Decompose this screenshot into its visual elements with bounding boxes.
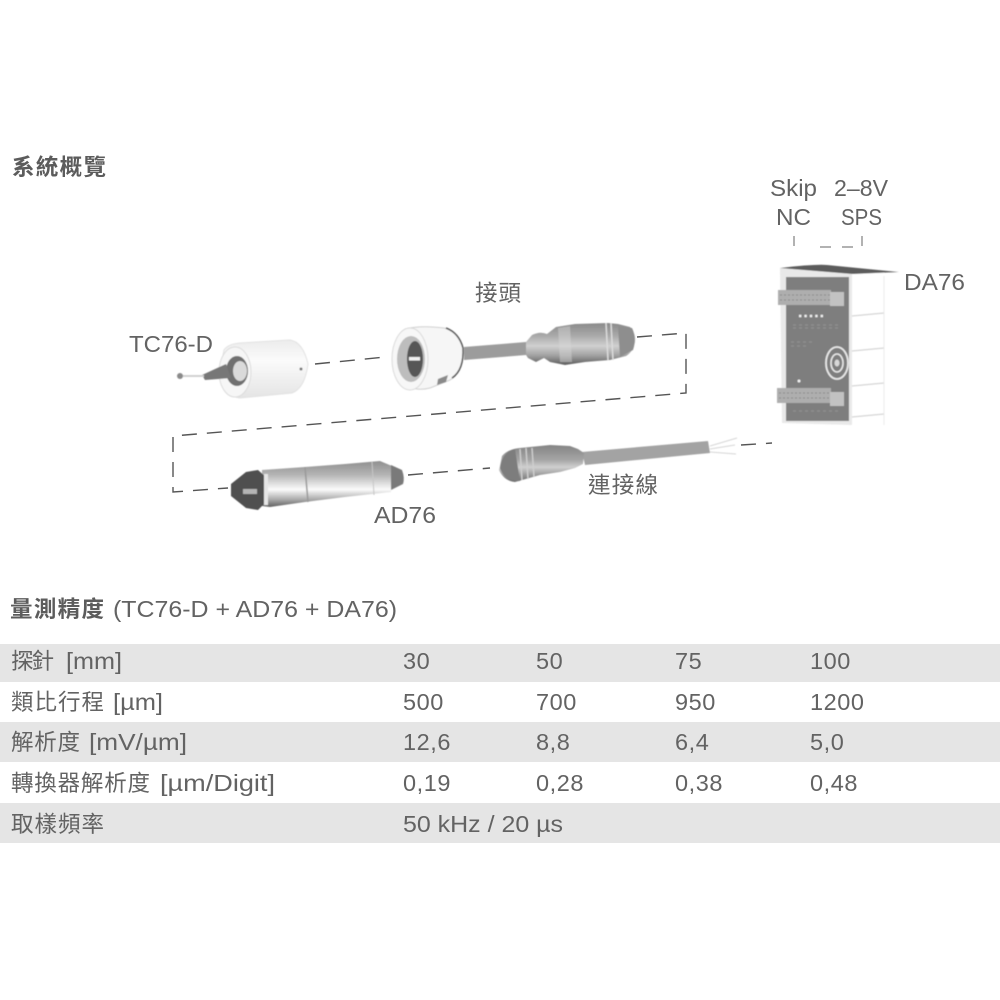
row 3: resolution: 解析度 bbox=[11, 730, 80, 755]
row 4: converter resolution: 0,38 bbox=[675, 770, 723, 796]
label: AD76: AD76 bbox=[374, 502, 436, 528]
row 4: converter resolution: 0,19 bbox=[403, 770, 451, 796]
row 1: probe: 100 bbox=[810, 648, 851, 674]
row 4: converter resolution: 轉換器解析度 bbox=[11, 771, 150, 796]
row 2: analog stroke bbox=[0, 682, 1000, 722]
label: DA76: DA76 bbox=[904, 269, 965, 295]
icon: DA76 module bbox=[777, 265, 899, 426]
row 3: resolution: 8,8 bbox=[536, 729, 570, 755]
heading: measuring accuracy bbox=[10, 596, 397, 622]
icon: AD76 amplifier bbox=[231, 461, 404, 510]
icon: connection cable bbox=[499, 438, 737, 482]
heading: measuring accuracy: 量測精度 bbox=[10, 597, 104, 622]
row 3: resolution: 6,4 bbox=[675, 729, 709, 755]
labels: DA76 terminals: Skip bbox=[770, 175, 817, 201]
row 1: probe: 50 bbox=[536, 648, 563, 674]
row 5: sampling rate: 取樣頻率 bbox=[11, 812, 104, 837]
row 1: probe bbox=[0, 644, 1000, 682]
icon: connector with cable bbox=[392, 323, 635, 390]
labels: DA76 terminals: 2–8V bbox=[834, 175, 888, 201]
row 3: resolution: 5,0 bbox=[810, 729, 844, 755]
row 5: sampling rate bbox=[0, 803, 1000, 843]
row 3: resolution: 12,6 bbox=[403, 729, 451, 755]
label: TC76-D: TC76-D bbox=[129, 331, 213, 357]
label: connection cable: 連接線 bbox=[588, 473, 658, 498]
labels: DA76 terminals: SPS bbox=[841, 204, 882, 230]
row 3: resolution: [mV/µm] bbox=[89, 729, 187, 755]
row 1: probe: 75 bbox=[675, 648, 702, 674]
icon: TC76-D probe bbox=[177, 340, 308, 398]
row 1: probe: 30 bbox=[403, 648, 430, 674]
row 2: analog stroke: 類比行程 bbox=[11, 690, 104, 715]
row 2: analog stroke: 1200 bbox=[810, 689, 864, 715]
dashed connection lines bbox=[173, 236, 862, 492]
row 4: converter resolution: [µm/Digit] bbox=[160, 770, 275, 796]
row 2: analog stroke: [µm] bbox=[113, 689, 163, 715]
label: connector: 接頭 bbox=[475, 281, 521, 306]
heading: system overview: 系統概覽 bbox=[12, 155, 106, 180]
row 1: probe: [mm] bbox=[66, 648, 122, 674]
row 5: sampling rate: 50 kHz / 20 µs bbox=[403, 811, 563, 837]
heading: measuring accuracy: (TC76-D + AD76 + DA76) bbox=[113, 596, 397, 622]
row 4: converter resolution: 0,48 bbox=[810, 770, 858, 796]
row 4: converter resolution: 0,28 bbox=[536, 770, 584, 796]
row 4: converter resolution bbox=[0, 762, 1000, 803]
row 3: resolution bbox=[0, 722, 1000, 762]
labels: DA76 terminals bbox=[770, 175, 888, 230]
row 2: analog stroke: 700 bbox=[536, 689, 577, 715]
row 1: probe: 探針 bbox=[11, 649, 54, 674]
row 2: analog stroke: 950 bbox=[675, 689, 716, 715]
table: accuracy specifications bbox=[0, 644, 1000, 843]
row 2: analog stroke: 500 bbox=[403, 689, 444, 715]
labels: DA76 terminals: NC bbox=[776, 204, 811, 230]
